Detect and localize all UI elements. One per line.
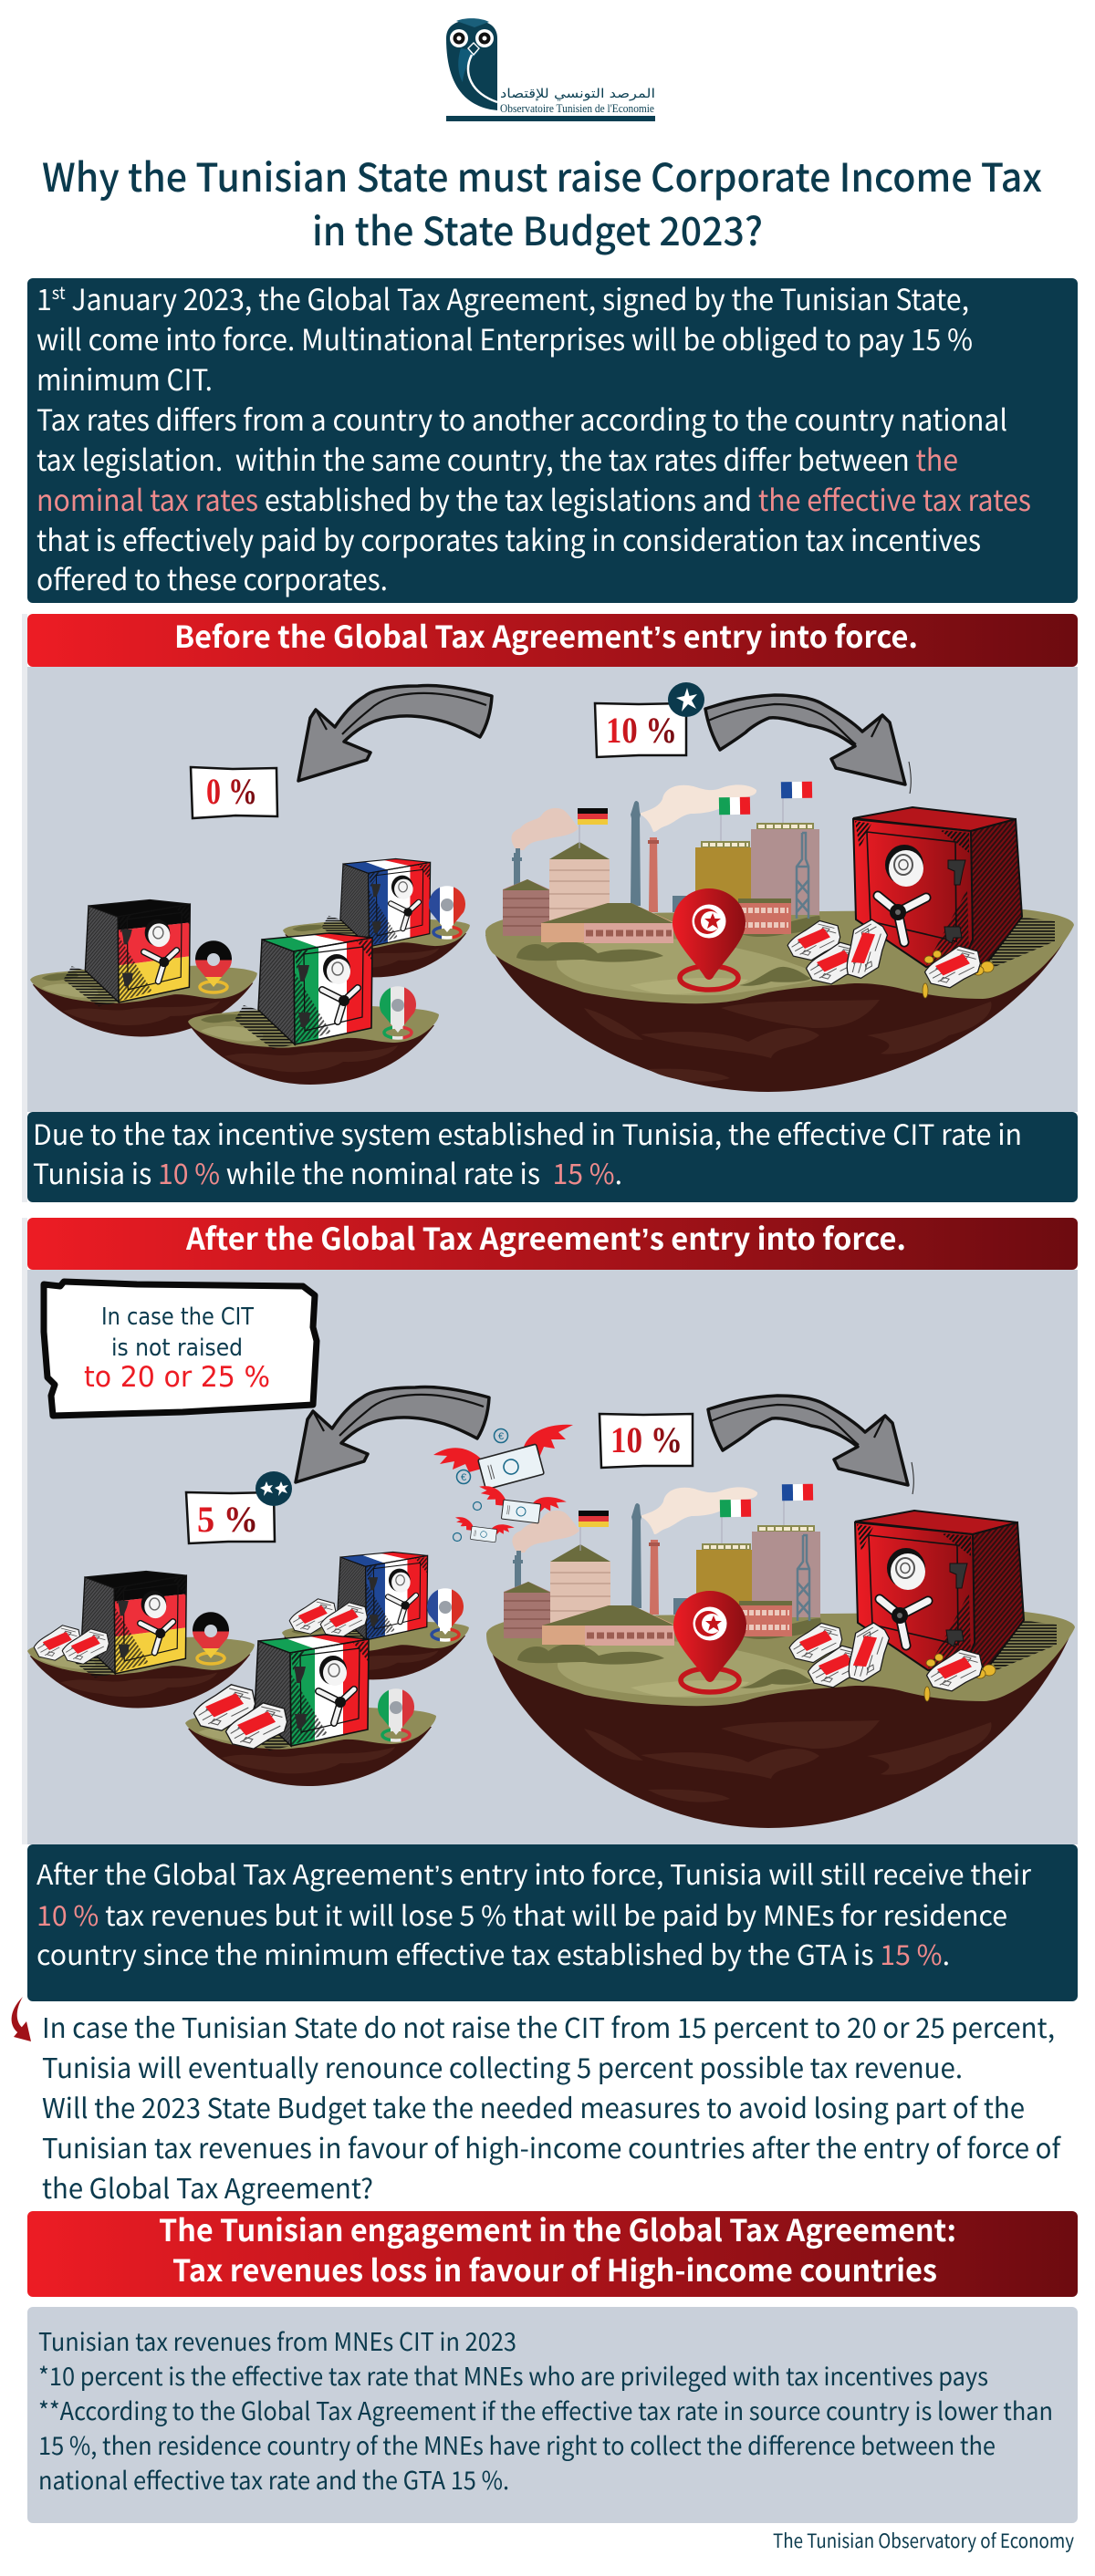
icon: flying money xyxy=(433,1425,573,1553)
arrow: to residence countries xyxy=(298,686,492,781)
text block: the question: Tunisia will eventually renounce collecting 5 percent possible tax revenue. xyxy=(42,2046,963,2086)
text block: the question: Tunisian tax revenues in favour of high-income countries after the entry of force of xyxy=(42,2126,1061,2166)
panel: after explanation: After the Global Tax Agreement’s entry into force, Tunisia will still receive their xyxy=(36,1853,1031,1893)
island: Italy with safe, money and pin xyxy=(185,1635,436,1786)
heading: after the agreement xyxy=(27,1215,1078,1270)
panel: introduction: Tax rates differs from a country to another according to the country national xyxy=(36,398,1007,440)
heading: the Tunisian engagement: The Tunisian engagement in the Global Tax Agreement: xyxy=(159,2207,956,2250)
text block: the question: Will the 2023 State Budget take the needed measures to avoid losing part of the xyxy=(42,2086,1025,2126)
callout: in case the CIT is not raised: to 20 or 25 % xyxy=(84,1361,270,1394)
panel: after scene background xyxy=(27,1270,1078,1844)
panel: notes: Tunisian tax revenues from MNEs CIT in 2023 xyxy=(38,2322,516,2358)
title: Why the Tunisian State must raise Corporate Income Tax xyxy=(42,147,1042,203)
panel: notes: **According to the Global Tax Agreement if the effective tax rate in source country is lower than xyxy=(38,2392,1053,2427)
panel: introduction: that is effectively paid by corporates taking in consideration tax incentives xyxy=(36,518,981,560)
logo: Observatoire Tunisien de l'Economie xyxy=(500,101,654,115)
heading: before the agreement: Before the Global Tax Agreement’s entry into force. xyxy=(174,613,918,657)
callout: in case the CIT is not raised: In case the CIT xyxy=(101,1304,254,1331)
panel: notes xyxy=(27,2307,1078,2523)
text block: the question: In case the Tunisian State do not raise the CIT from 15 percent to 20 or 25 percent, xyxy=(42,2006,1055,2046)
label: 0 percent xyxy=(191,767,277,818)
label: 10 percent: 10 % xyxy=(610,1419,683,1460)
panel: before scene background xyxy=(27,667,1078,1112)
arrow: to Tunisia safe xyxy=(708,1396,913,1494)
panel: after explanation: 10 % tax revenues but it will lose 5 % that will be paid by MNEs for residence xyxy=(36,1894,1007,1934)
island: France with safe and pin xyxy=(283,858,470,977)
text block: the question xyxy=(42,2006,1061,2207)
panel: after explanation xyxy=(27,1844,1078,2001)
arrow: to Tunisia safe xyxy=(705,695,911,794)
panel: before explanation: Due to the tax incentive system established in Tunisia, the effective CIT rate in xyxy=(33,1112,1022,1153)
heading: the Tunisian engagement xyxy=(27,2207,1078,2297)
icon: flying money: € xyxy=(461,1472,466,1483)
heading: before the agreement xyxy=(27,613,1078,667)
panel: introduction: will come into force. Multinational Enterprises will be obliged to pay 15 % xyxy=(36,317,973,359)
label: 5 percent with double star badge: 5 % xyxy=(197,1499,258,1540)
label: 10 percent xyxy=(600,1414,693,1468)
island: Tunisia with factory, pin, safe and money xyxy=(486,1484,1075,1828)
title: in the State Budget 2023? xyxy=(312,201,763,257)
island: France with safe, money and pin xyxy=(282,1552,469,1679)
panel: introduction: minimum CIT. xyxy=(36,358,213,400)
panel: introduction: st xyxy=(52,280,66,305)
title xyxy=(42,147,1042,257)
callout: in case the CIT is not raised: is not raised xyxy=(111,1335,243,1362)
panel: introduction: offered to these corporates. xyxy=(36,557,388,599)
panel: introduction: 1 xyxy=(36,277,53,319)
panel: after explanation: country since the minimum effective tax established by the GTA is 15 %. xyxy=(36,1933,950,1973)
label: 5 percent with double star badge xyxy=(186,1471,292,1543)
panel: notes: *10 percent is the effective tax rate that MNEs who are privileged with tax incentives pays xyxy=(38,2357,988,2393)
callout: in case the CIT is not raised xyxy=(44,1282,317,1416)
text block: the question: the Global Tax Agreement? xyxy=(42,2166,373,2207)
panel: introduction: nominal tax rates established by the tax legislations and the effective tax rates xyxy=(36,478,1031,520)
panel: introduction: tax legislation. within the same country, the tax rates differ between the xyxy=(36,438,958,480)
logo: المرصد التونسي للإقتصاد xyxy=(500,87,655,101)
heading: after the agreement: After the Global Tax Agreement’s entry into force. xyxy=(185,1215,906,1259)
heading: the Tunisian engagement: Tax revenues loss in favour of High-income countries xyxy=(172,2247,937,2290)
panel: introduction: January 2023, the Global Tax Agreement, signed by the Tunisian State, xyxy=(66,277,969,319)
island: Tunisia with factory, pin, safe and money xyxy=(485,782,1074,1092)
island: Germany with safe and pin xyxy=(30,900,257,1036)
icon: flying money: € xyxy=(498,1431,504,1442)
panel: notes: national effective tax rate and the GTA 15 %. xyxy=(38,2461,509,2497)
label: 10 percent with star badge xyxy=(595,682,704,757)
arrow: red curved pointer xyxy=(12,1997,31,2041)
panel: introduction xyxy=(27,277,1078,603)
logo xyxy=(446,18,655,121)
illustration: before scene xyxy=(30,682,1074,1092)
label: 0 percent: 0 % xyxy=(206,771,257,812)
label: 10 percent with star badge: 10 % xyxy=(606,710,677,751)
island: Italy with safe and pin xyxy=(188,933,439,1085)
panel: before explanation xyxy=(27,1112,1078,1202)
panel: notes: 15 %, then residence country of the MNEs have right to collect the difference between the xyxy=(38,2426,996,2462)
island: Germany with safe, money and pin xyxy=(27,1572,255,1708)
illustration: after scene xyxy=(27,1282,1075,1828)
arrow: to residence countries xyxy=(296,1387,489,1482)
panel: before explanation: Tunisia is 10 % while the nominal rate is 15 %. xyxy=(33,1151,622,1192)
